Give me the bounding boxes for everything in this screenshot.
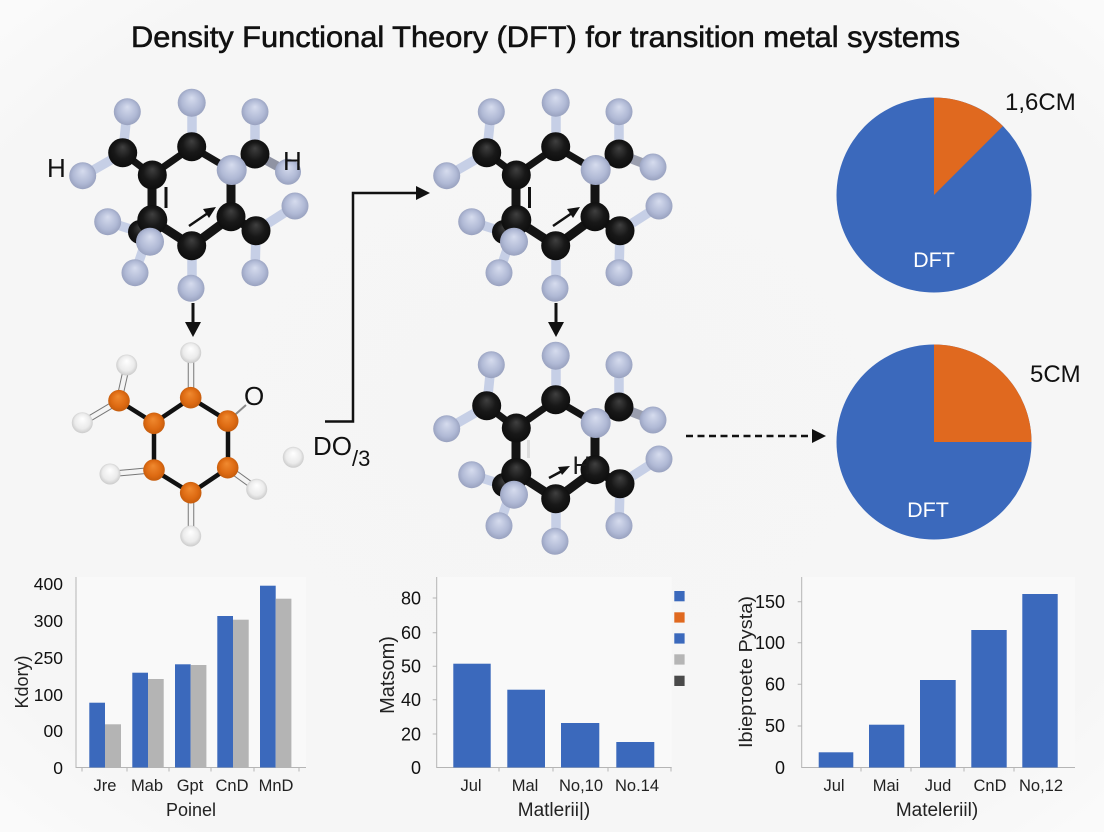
arrow: inner ring arrow (189, 207, 216, 226)
y axis labels: 60 (401, 623, 421, 643)
y axis labels (34, 574, 63, 778)
y axis labels: 80 (401, 588, 421, 608)
y axis labels: 0 (411, 758, 421, 778)
pie label: DFT: DFT (913, 248, 955, 272)
y axis labels: 250 (34, 648, 63, 668)
blue bars (89, 586, 276, 768)
x axis labels (94, 777, 293, 795)
x axis labels (823, 777, 1063, 795)
x axis labels (460, 777, 659, 795)
mark: faint bar in lower ring (527, 440, 530, 458)
label: H inside lower ring: H (572, 452, 591, 480)
x axis labels: MnD (259, 777, 293, 795)
x axis labels: Jud (925, 777, 951, 795)
mark: vertical bar in centre ring (528, 187, 531, 208)
y axis labels: 00 (44, 721, 63, 741)
grey bars (105, 599, 291, 768)
y axis labels: 50 (401, 656, 421, 676)
pie label: DFT lower: DFT (907, 498, 949, 522)
arrow: down from first molecule (185, 303, 201, 337)
x axis labels: Mai (873, 777, 899, 795)
label: H left: H (47, 153, 66, 183)
bars (819, 594, 1058, 768)
x axis labels: Mab (131, 777, 163, 795)
pie value: 1,6CM: 1,6CM (1005, 89, 1076, 116)
molecule: orange and white structure (72, 342, 267, 546)
label: O: O (244, 381, 264, 411)
pie chart: top (836, 98, 1032, 292)
y axis title: Matsom) (377, 636, 399, 714)
molecule: top left black and blue structure (69, 89, 308, 302)
x axis labels: Jul (823, 777, 845, 795)
atom: free white sphere (283, 447, 304, 468)
pie value: 5CM: 5CM (1030, 361, 1081, 388)
y axis labels: 60 (765, 674, 785, 694)
arrow: down from centre molecule (548, 303, 564, 337)
x axis labels: No.14 (615, 777, 659, 795)
x axis labels: No,10 (559, 777, 603, 795)
x axis title: Poinel (166, 800, 216, 820)
y axis labels: 0 (775, 758, 785, 778)
arrow: elbow to second molecule (325, 186, 430, 422)
molecule: lower centre black and blue structure (433, 342, 672, 555)
legend swatches (674, 591, 685, 686)
x axis labels: Jre (94, 777, 116, 795)
y axis labels: 300 (34, 611, 63, 631)
molecule: top centre black and blue structure (433, 89, 672, 302)
y axis labels: 50 (765, 716, 785, 736)
x axis labels: Mal (512, 777, 538, 795)
title: Density Functional Theory (DFT) for transition metal systems (131, 21, 960, 54)
y axis labels: 150 (755, 592, 785, 612)
bar chart: right (736, 577, 1075, 821)
x axis labels: No,12 (1019, 777, 1063, 795)
pie chart: bottom (836, 344, 1032, 540)
x axis title: Matlerii|) (518, 800, 590, 821)
label: DO/3: /3 (352, 446, 370, 471)
y axis labels: 20 (401, 724, 421, 744)
arrow: inner centre ring arrow (553, 207, 580, 226)
x axis labels: Gpt (177, 777, 204, 795)
label: DO/3: DO (313, 431, 352, 461)
arrow: dashed to lower pie (686, 429, 826, 443)
bar chart: left grouped (12, 574, 306, 820)
x axis labels: Jul (460, 777, 482, 795)
label: H right: H (283, 146, 302, 176)
y axis title: Kdory) (12, 655, 32, 709)
y axis labels: 100 (34, 685, 63, 705)
x axis labels: CnD (973, 777, 1007, 795)
y axis labels: 100 (755, 633, 785, 653)
y axis labels: 40 (401, 690, 421, 710)
arrow: inner lower ring arrow (549, 466, 570, 478)
y axis labels (755, 592, 785, 778)
mark: vertical bar in ring (164, 187, 168, 208)
bar chart: centre (377, 577, 685, 821)
y axis labels (401, 588, 421, 778)
y axis labels: 400 (34, 574, 63, 594)
y axis labels: 0 (53, 758, 63, 778)
bars (453, 664, 654, 768)
x axis title: Mateleriil) (896, 800, 978, 821)
x axis labels: CnD (215, 777, 249, 795)
y axis title: Ibiepτoete Pysta) (736, 596, 756, 748)
